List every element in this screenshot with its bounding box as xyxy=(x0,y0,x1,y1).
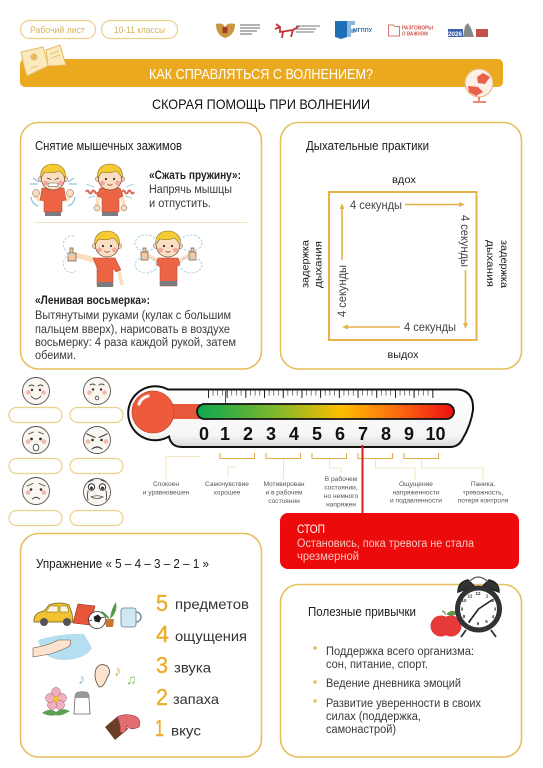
label: tension: Ощущение xyxy=(399,481,433,488)
logo: MGPPU xyxy=(335,21,372,39)
counts list: запаха xyxy=(173,691,219,707)
bullet list: самонастрой) xyxy=(326,724,396,736)
arrow: right: 4 секунды xyxy=(458,215,470,267)
label: calm: и уравновешен xyxy=(143,490,190,496)
pill: worksheet label xyxy=(20,20,96,38)
illustration: boy clenching xyxy=(30,164,77,216)
bulb xyxy=(132,391,200,433)
pill: answer 2 xyxy=(70,408,123,422)
icon: globe xyxy=(465,69,493,102)
face: happy xyxy=(22,378,50,404)
stop line xyxy=(362,445,364,514)
label: panic: потеря контроля xyxy=(458,498,509,504)
illustration: ear and music notes: ♫ xyxy=(126,671,136,687)
counts list: ощущения xyxy=(175,628,247,644)
label: motivated: Мотивирован xyxy=(263,481,305,488)
label: slightly tense: В рабочем xyxy=(325,475,358,483)
bullet list xyxy=(313,646,481,736)
illustration: hand on surface xyxy=(33,634,92,660)
counts list: 4 xyxy=(156,621,169,647)
illustration: boy one arm up xyxy=(64,231,122,287)
face: sad xyxy=(22,478,50,504)
text: clench the spring: «Сжать пружину»: xyxy=(149,170,241,182)
label: hold right: дыхания xyxy=(484,240,496,287)
logo: ministry xyxy=(216,24,260,38)
arrow: top xyxy=(350,200,465,212)
counts list: 5 xyxy=(156,590,168,616)
panel: breathing practices xyxy=(280,122,522,369)
icon: alarm clock: 9 xyxy=(461,606,464,612)
scale numbers: 1 xyxy=(220,424,230,444)
counts list: предметов xyxy=(175,596,249,612)
pill: answer 5 xyxy=(9,510,62,526)
label: tension: и подавленности xyxy=(390,498,442,504)
counts list xyxy=(155,590,249,741)
label: hold right xyxy=(484,240,510,288)
scale numbers: 3 xyxy=(266,424,276,444)
pill: worksheet label: Рабочий лист xyxy=(30,25,85,35)
bullet list: Поддержка всего организма: xyxy=(326,646,474,658)
scale numbers: 9 xyxy=(404,424,414,444)
callout: stop: чрезмерной xyxy=(297,551,359,563)
text: lazy eight xyxy=(35,295,236,362)
text: clench the spring: и отпустить. xyxy=(149,198,211,210)
icon: alarm clock: 11 xyxy=(468,594,473,598)
arrow: bottom: 4 секунды xyxy=(404,322,456,334)
label: inhale: вдох xyxy=(392,174,417,186)
icon: open book xyxy=(21,45,66,76)
pill: answer 1 xyxy=(9,408,62,422)
illustration: ear and music notes xyxy=(78,663,136,688)
text: clench the spring xyxy=(149,170,241,210)
scale numbers: 5 xyxy=(312,424,322,444)
scale numbers: 10 xyxy=(425,424,446,444)
icon: alarm clock xyxy=(455,577,502,637)
heading: habits: Полезные привычки xyxy=(308,605,416,619)
counts list: 2 xyxy=(156,684,168,710)
counts list: 3 xyxy=(156,652,168,678)
counts list: звука xyxy=(174,660,211,676)
label: slightly tense: напряжен xyxy=(326,502,356,508)
icon: alarm clock: 12 xyxy=(475,591,481,596)
face: angry xyxy=(84,426,110,454)
pill: answer 6 xyxy=(70,510,123,526)
pill: answer 3 xyxy=(9,458,62,474)
logo: horse xyxy=(275,24,320,38)
label: slightly tense: но немного xyxy=(324,493,358,500)
scale numbers: 0 xyxy=(199,424,209,444)
thermometer xyxy=(128,386,473,447)
illustration: flower and salt shaker xyxy=(42,688,90,716)
pill: grades xyxy=(102,20,178,38)
illustration: ear and music notes: ♪ xyxy=(78,671,86,688)
illustration: five objects xyxy=(34,602,141,628)
counts list: 1 xyxy=(155,715,164,741)
label: hold right: задержка xyxy=(498,240,510,288)
icon: alarm clock: 7 xyxy=(469,619,472,624)
label: slightly tense: состоянии, xyxy=(324,484,358,492)
illustration: boy both arms up xyxy=(135,231,202,286)
logo: important talks xyxy=(388,25,433,38)
arrow: left: 4 секунды xyxy=(337,265,349,317)
logo: MGPPU: МГППУ xyxy=(353,28,372,34)
label: hold left: дыхания xyxy=(312,241,324,288)
face: surprised xyxy=(84,378,110,404)
heading: exercise: Упражнение « 5 – 4 – 3 – 2 – 1 » xyxy=(36,557,209,571)
icon: alarm clock: 2 xyxy=(492,598,495,603)
icon: alarm clock: 6 xyxy=(477,621,480,626)
icon: alarm clock: 5 xyxy=(485,619,488,624)
banner xyxy=(20,59,503,87)
panel: muscle tension xyxy=(20,122,262,369)
text: lazy eight: восьмерку: 4 раза каждой рукой, затем xyxy=(35,337,236,349)
face: crying xyxy=(84,478,110,506)
label: feeling good: Самочувствие xyxy=(205,481,249,488)
scale numbers: 6 xyxy=(335,424,345,444)
icon: alarm clock: 3 xyxy=(494,606,497,612)
arrow: left xyxy=(337,203,349,317)
callout: stop: СТОП xyxy=(297,524,325,536)
bullet list: Ведение дневника эмоций xyxy=(326,678,461,690)
label: calm: Спокоен xyxy=(153,481,179,488)
heading: breathing: Дыхательные практики xyxy=(306,139,429,153)
bullet list: Развитие уверенности в своих xyxy=(326,698,481,710)
text: lazy eight: пальцем вверх), нарисовать в воздухе xyxy=(35,324,230,336)
panel: useful habits xyxy=(280,577,522,757)
scale ticks xyxy=(208,391,434,404)
callout: stop xyxy=(280,513,519,569)
scale numbers: 2 xyxy=(243,424,253,444)
arrow: top: 4 секунды xyxy=(350,200,402,212)
mercury scale bar xyxy=(197,404,454,419)
arrow: right xyxy=(458,215,470,329)
icon: alarm clock: 4 xyxy=(492,614,495,619)
pill: grades: 10-11 классы xyxy=(114,25,165,35)
bullet list: сон, питание, спорт. xyxy=(326,659,428,671)
panel: 5-4-3-2-1 exercise xyxy=(20,534,262,757)
label: tension: напряженности xyxy=(392,490,440,496)
label: exhale: выдох xyxy=(388,349,419,361)
scale numbers: 7 xyxy=(358,424,368,444)
label: motivated: и в рабочем xyxy=(265,488,303,496)
arrow: bottom xyxy=(342,322,456,334)
bullet list: силах (поддержка, xyxy=(326,711,421,723)
icon: alarm clock: 1 xyxy=(486,594,489,598)
label: motivated: состоянии xyxy=(268,498,300,505)
face: scared xyxy=(22,426,50,454)
text: lazy eight: «Ленивая восьмерка»: xyxy=(35,295,150,307)
scale numbers: 4 xyxy=(289,424,299,444)
logo: year 2026: 2026 xyxy=(448,31,462,38)
level labels xyxy=(143,475,509,508)
logo: important talks: О ВАЖНОМ xyxy=(402,32,428,38)
logo: year 2026 xyxy=(448,23,488,38)
scale brackets and leaders xyxy=(166,453,483,480)
scale numbers xyxy=(199,424,446,444)
text: clench the spring: Напрячь мышцы xyxy=(149,184,232,196)
label: hold left: задержка xyxy=(300,240,312,288)
emotion faces xyxy=(9,378,123,526)
thermometer body xyxy=(128,386,473,447)
scale numbers: 8 xyxy=(381,424,391,444)
icon: alarm clock: 8 xyxy=(463,614,466,619)
heading: muscle tension: Снятие мышечных зажимов xyxy=(35,139,182,153)
label: panic: Паника, xyxy=(471,481,495,488)
label: panic: тревожность, xyxy=(463,490,504,496)
illustration: boy relaxed xyxy=(86,164,134,216)
text: lazy eight: Вытянутыми руками (кулак с большим xyxy=(35,310,231,322)
pill: answer 4 xyxy=(70,458,123,474)
label: feeling good: хорошее xyxy=(214,490,241,496)
illustration: chocolate and tongue xyxy=(105,715,140,740)
subtitle: СКОРАЯ ПОМОЩЬ ПРИ ВОЛНЕНИИ xyxy=(152,96,370,112)
icon: apple xyxy=(430,611,462,636)
banner title: КАК СПРАВЛЯТЬСЯ С ВОЛНЕНИЕМ? xyxy=(149,67,373,83)
logo: important talks: РАЗГОВОРЫ xyxy=(402,26,433,32)
icon: alarm clock: 10 xyxy=(461,598,467,603)
illustration: ear and music notes: ♪ xyxy=(114,663,122,680)
label: hold left xyxy=(300,240,324,288)
breathing square xyxy=(329,192,476,340)
text: lazy eight: обеими. xyxy=(35,350,76,362)
counts list: вкус xyxy=(171,722,201,738)
callout: stop: Остановись, пока тревога не стала xyxy=(297,538,475,550)
